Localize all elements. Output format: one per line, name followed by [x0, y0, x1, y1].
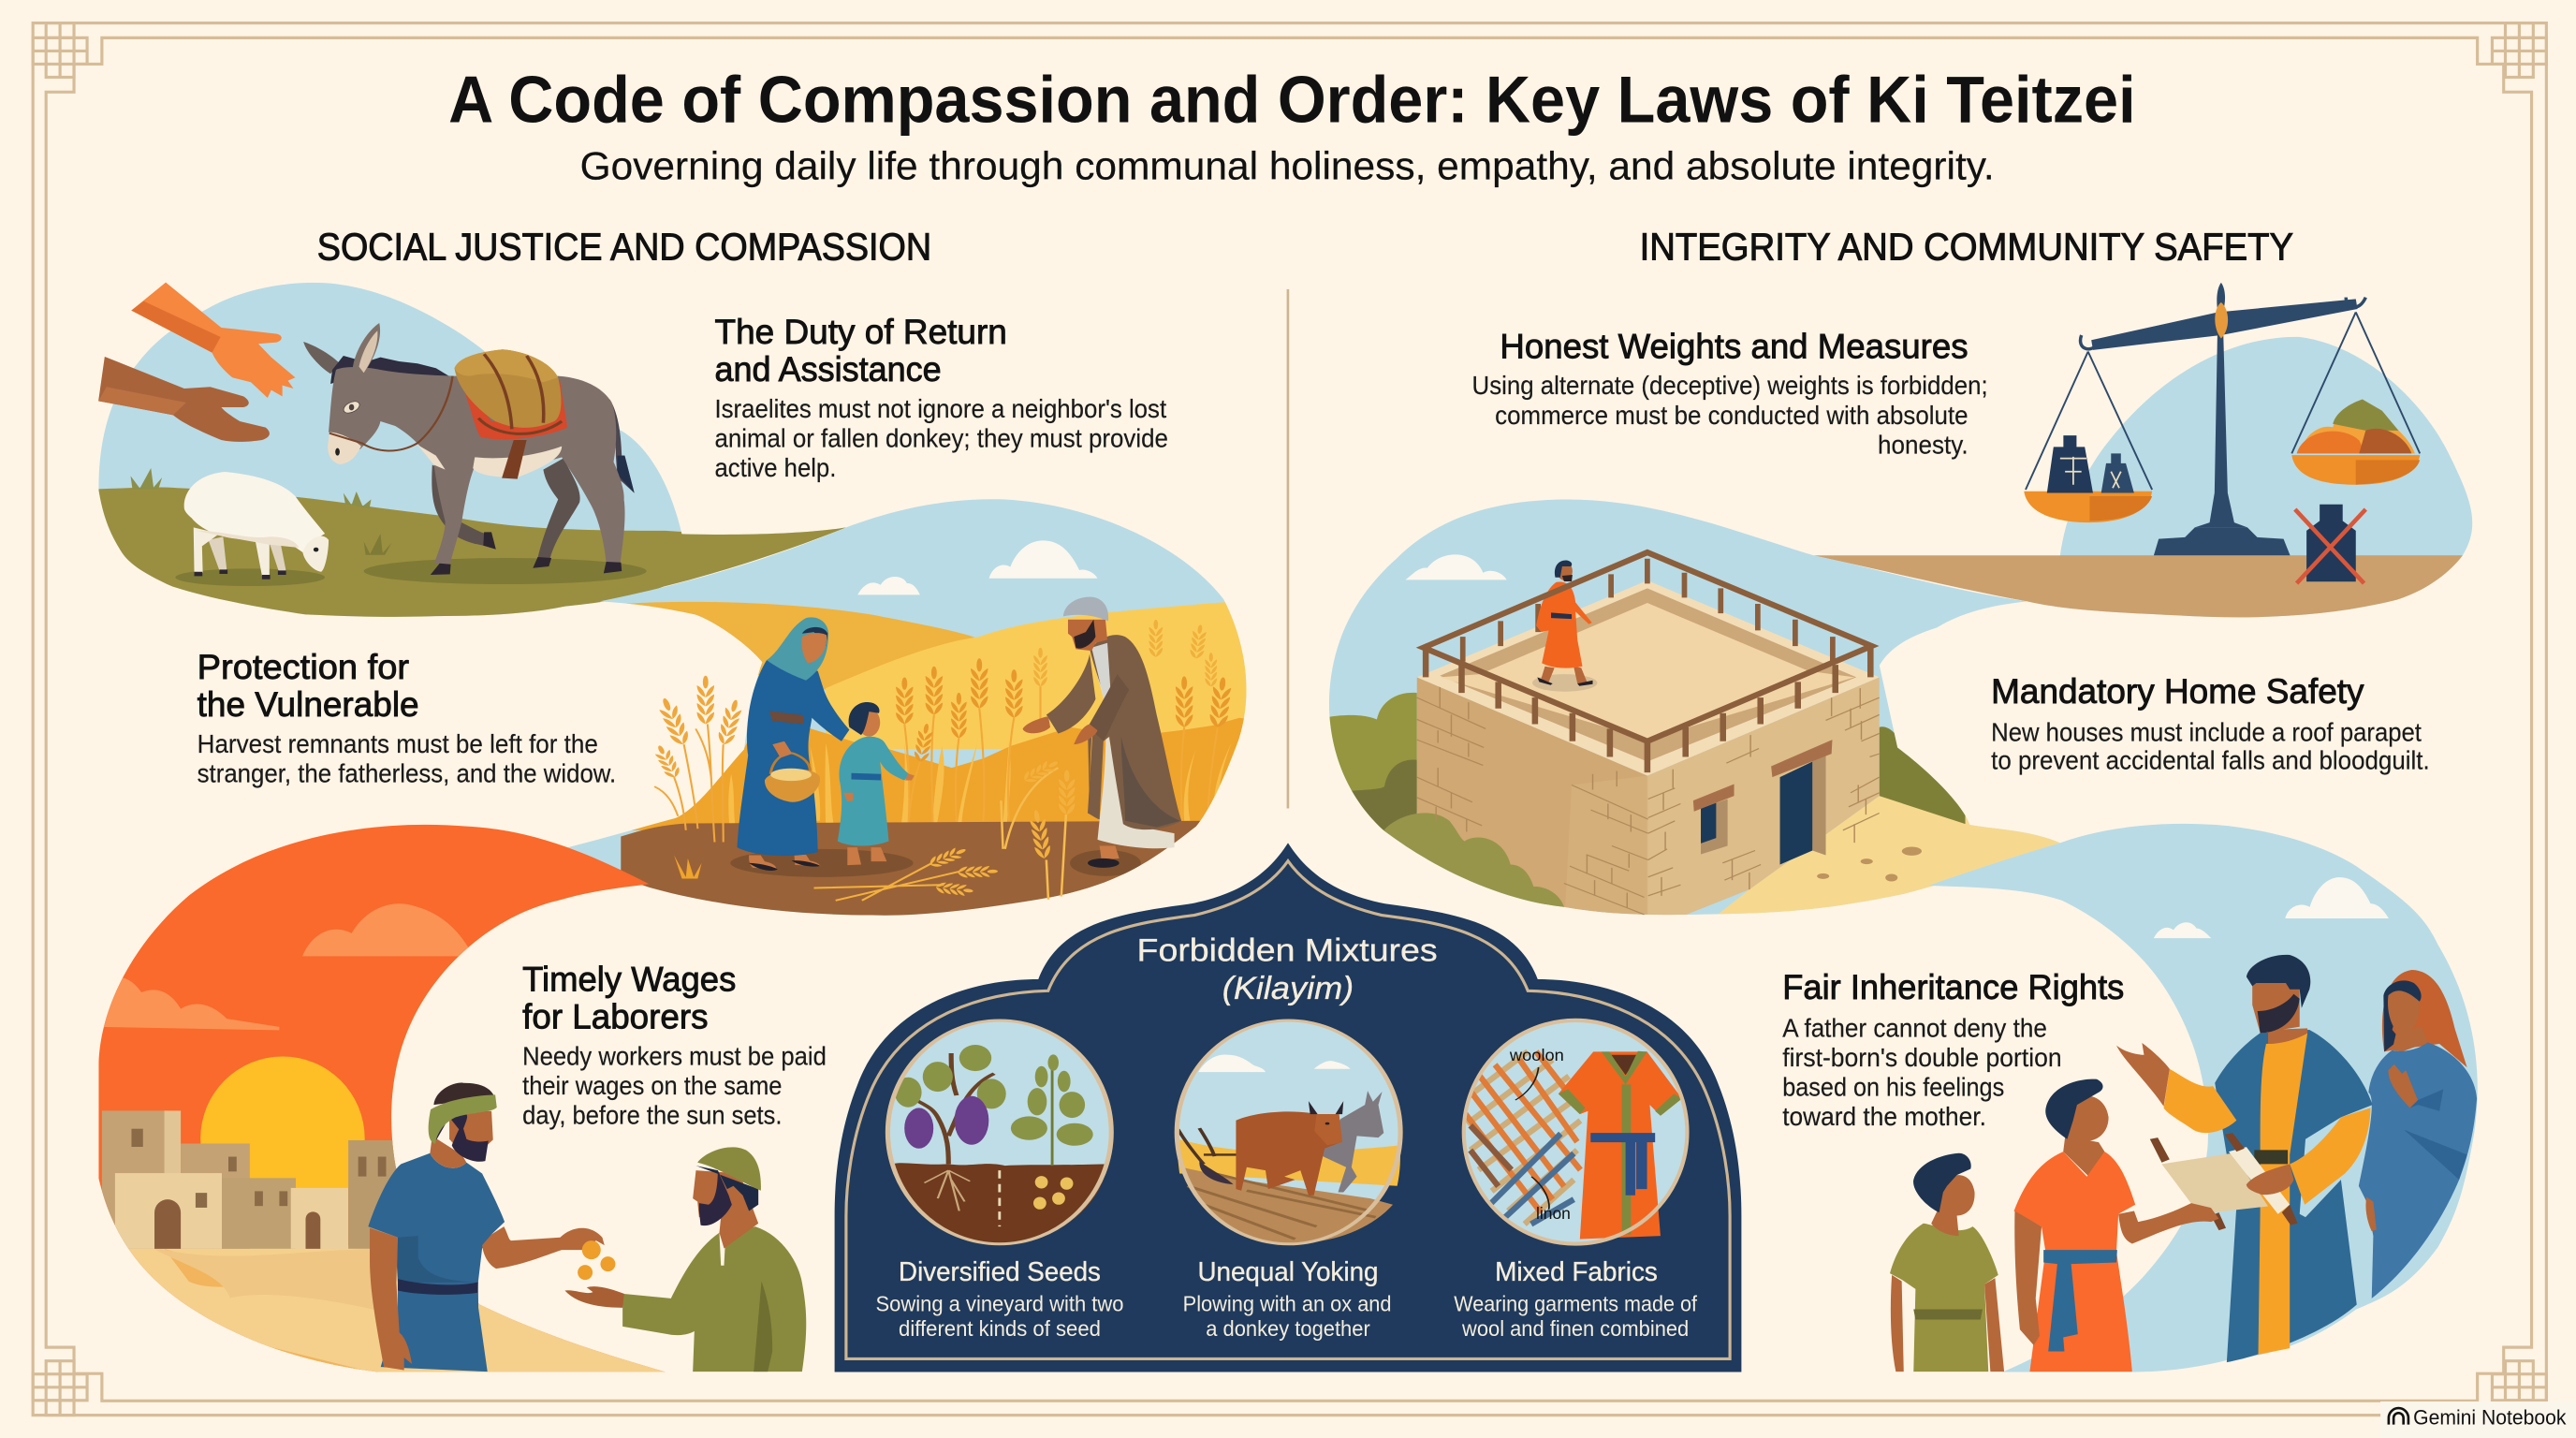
icon: grass and shadows — [131, 468, 647, 586]
text block: fair inheritance: A father cannot deny the — [1782, 1013, 2047, 1042]
icon: family with scroll — [1890, 955, 2477, 1372]
text block: fair inheritance: Fair Inheritance Rights — [1782, 968, 2124, 1006]
text block: timely wages: Timely Wages — [522, 960, 736, 998]
icon: falling coins — [578, 1240, 615, 1280]
watermark: Gemini Notebook — [2380, 1401, 2576, 1438]
icon: parapet front rail — [1424, 552, 1872, 772]
text block: home safety: Mandatory Home Safety — [1991, 672, 2364, 711]
text: mixed fabrics: Wearing garments made of — [1454, 1292, 1698, 1316]
icon: man in brown robe — [1023, 597, 1181, 868]
text block: duty of return: The Duty of Return — [714, 313, 1007, 351]
panel: harvest illustration — [567, 499, 1247, 916]
icon: unequal yoking circle — [1177, 1020, 1400, 1244]
icon: child — [838, 702, 915, 865]
icon: scroll — [2150, 1133, 2298, 1230]
text block: timely wages: for Laborers — [522, 998, 708, 1036]
text block: honest weights: Using alternate (deceptive) weights is forbidden; — [1472, 371, 1988, 400]
text block: home safety: to prevent accidental falls and bloodguilt. — [1991, 745, 2430, 774]
text: diversified seeds: Diversified Seeds — [899, 1257, 1101, 1287]
section heading: integrity: INTEGRITY AND COMMUNITY SAFETY — [1640, 225, 2293, 268]
text block: timely wages — [522, 960, 827, 1129]
text: mixed fabrics — [1454, 1257, 1698, 1341]
icon: person on roof — [1532, 561, 1597, 692]
text block: timely wages: Needy workers must be paid — [522, 1041, 827, 1070]
icon: mixed fabrics circle — [1464, 1020, 1687, 1244]
text block: protection for the vulnerable: Protection for — [198, 648, 409, 686]
text block: fair inheritance: first-born's double portion — [1782, 1043, 2062, 1072]
text: unequal yoking — [1183, 1257, 1392, 1341]
text block: protection for the vulnerable: Harvest remnants must be left for the — [198, 729, 598, 758]
icon: wheat stalks at left — [651, 676, 744, 842]
text block: fair inheritance: toward the mother. — [1782, 1102, 1986, 1131]
text: diversified seeds: different kinds of seed — [899, 1316, 1101, 1341]
heading: forbidden mixtures: (Kilayim) — [1222, 971, 1354, 1006]
text block: honest weights: honesty. — [1878, 430, 1969, 459]
panel: inheritance background — [1922, 814, 2489, 1380]
text: diversified seeds: Sowing a vineyard with two — [875, 1292, 1123, 1316]
panel: house with parapet illustration — [1329, 500, 2059, 916]
text: mixed fabrics: Mixed Fabrics — [1495, 1257, 1658, 1287]
icon: diversified seeds circle — [887, 1020, 1111, 1244]
text block: honest weights: Honest Weights and Measures — [1500, 328, 1969, 366]
icon: roof deck and parapet — [1417, 559, 1880, 775]
icon: older son — [2014, 1079, 2218, 1372]
icon: donkey — [303, 323, 635, 575]
watermark: Gemini Notebook: Gemini Notebook — [2413, 1406, 2566, 1430]
text block: fair inheritance: based on his feelings — [1782, 1073, 2004, 1102]
text: unequal yoking: Unequal Yoking — [1197, 1257, 1379, 1287]
icon: mother — [2359, 970, 2477, 1299]
text: diversified seeds — [875, 1257, 1123, 1341]
text block: protection for the vulnerable — [198, 648, 616, 787]
icon: green-robed worker — [564, 1147, 806, 1372]
text block: home safety: New houses must include a roof parapet — [1991, 718, 2422, 747]
text block: duty of return: active help. — [714, 453, 836, 482]
text block: duty of return: Israelites must not ignore a neighbor's lost — [714, 394, 1167, 423]
text: unequal yoking: a donkey together — [1206, 1316, 1370, 1341]
section heading: social justice: SOCIAL JUSTICE AND COMPASSION — [317, 225, 931, 268]
panel: donkey illustration — [98, 283, 846, 617]
icon: younger son — [1890, 1153, 2004, 1372]
text block: protection for the vulnerable: stranger, the fatherless, and the widow. — [198, 758, 616, 787]
text block: timely wages: day, before the sun sets. — [522, 1100, 782, 1129]
icon: gathered wheat — [814, 757, 1076, 901]
icon: mixed fabrics circle: woolon — [1509, 1046, 1564, 1064]
text block: duty of return: and Assistance — [714, 350, 942, 389]
text block: duty of return: animal or fallen donkey; they must provide — [714, 423, 1168, 452]
panel: forbidden mixtures — [835, 843, 1741, 1372]
heading: forbidden mixtures: Forbidden Mixtures — [1137, 933, 1438, 969]
text block: timely wages: their wages on the same — [522, 1071, 782, 1100]
icon: stone walls and door — [1417, 686, 1880, 915]
text: unequal yoking: Plowing with an ox and — [1183, 1292, 1392, 1316]
icon: balance scale — [2024, 283, 2420, 583]
icon: mixed fabrics circle: linon — [1536, 1204, 1571, 1223]
text: mixed fabrics: wool and finen combined — [1461, 1316, 1689, 1341]
icon: helping hand orange — [131, 283, 295, 398]
text block: protection for the vulnerable: the Vulnerable — [198, 685, 419, 724]
title: A Code of Compassion and Order: Key Laws of Ki Teitzei — [448, 63, 2136, 137]
panel: scales illustration — [1808, 283, 2497, 629]
panel: sunset village illustration — [82, 814, 674, 1380]
icon: woman with basket — [737, 617, 849, 871]
heading: forbidden mixtures — [1137, 933, 1438, 1006]
icon: sheep — [184, 472, 329, 580]
icon: helping hand brown — [98, 357, 270, 442]
text block: honest weights — [1472, 328, 1988, 459]
icon: father — [2116, 955, 2373, 1362]
text block: duty of return — [714, 313, 1168, 482]
subtitle: Governing daily life through communal holiness, empathy, and absolute integrity. — [580, 144, 1995, 187]
text block: honest weights: commerce must be conducted with absolute — [1495, 401, 1969, 430]
icon: laborer paying wages — [368, 1083, 806, 1372]
text block: fair inheritance — [1782, 968, 2124, 1131]
icon: blue-robed employer — [368, 1083, 605, 1372]
text block: home safety — [1991, 672, 2430, 774]
